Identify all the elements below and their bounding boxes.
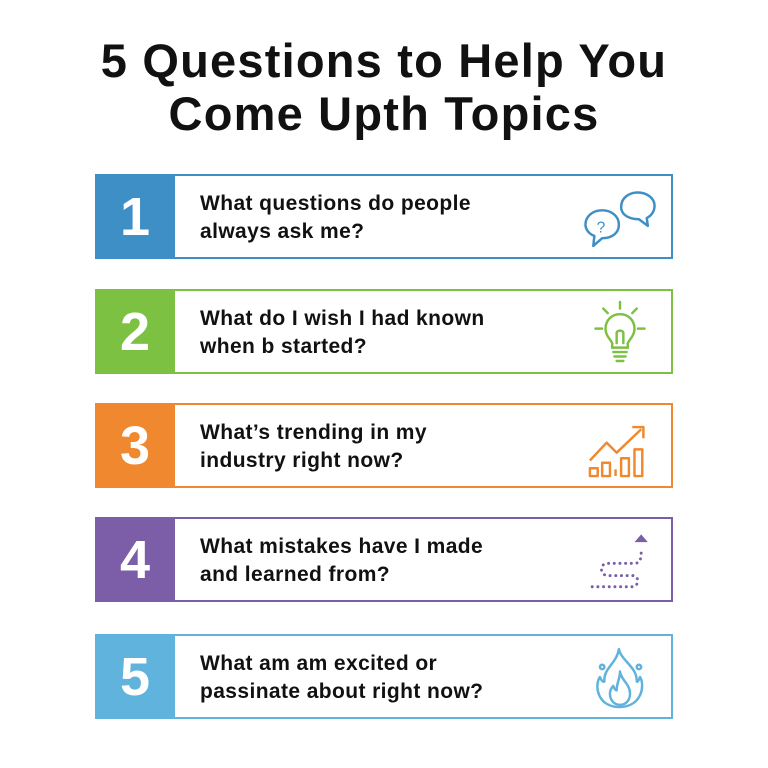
row 2 <box>95 289 673 374</box>
number 1: 1 <box>120 186 150 246</box>
icon: speech bubbles: ? <box>597 220 606 237</box>
text 5 <box>200 652 483 703</box>
number 3 <box>95 403 175 488</box>
icon: winding path arrow <box>590 534 648 588</box>
text 2 <box>200 307 485 358</box>
row 3 <box>95 403 673 488</box>
title <box>101 34 667 140</box>
row 1 <box>95 174 673 259</box>
number 4 <box>95 517 175 602</box>
number 5 <box>95 634 175 719</box>
text 4: and learned from? <box>200 563 390 586</box>
text 1: What questions do people <box>200 192 471 215</box>
number 1 <box>95 174 175 259</box>
text 3: industry right now? <box>200 449 404 472</box>
number 2 <box>95 289 175 374</box>
title: Come Upth Topics <box>169 87 599 140</box>
text 5: passinate about right now? <box>200 680 483 703</box>
icon: flame <box>596 648 644 708</box>
number 2: 2 <box>120 302 150 362</box>
icon: trend chart <box>588 426 645 478</box>
text 4: What mistakes have I made <box>200 535 483 558</box>
number 4: 4 <box>120 530 150 590</box>
text 2: What do I wish I had known <box>200 307 485 330</box>
text 4 <box>200 535 483 586</box>
icon: light bulb <box>594 300 646 362</box>
text 5: What am am excited or <box>200 652 437 675</box>
number 3: 3 <box>120 416 150 476</box>
text 3 <box>200 421 427 472</box>
icon: speech bubbles <box>584 191 656 248</box>
title: 5 Questions to Help You <box>101 34 667 87</box>
text 1: always ask me? <box>200 220 364 243</box>
number 5: 5 <box>120 646 150 706</box>
row 5 <box>95 634 673 719</box>
text 1 <box>200 192 471 243</box>
text 3: What’s trending in my <box>200 421 427 444</box>
row 4 <box>95 517 673 602</box>
text 2: when b started? <box>200 335 367 358</box>
